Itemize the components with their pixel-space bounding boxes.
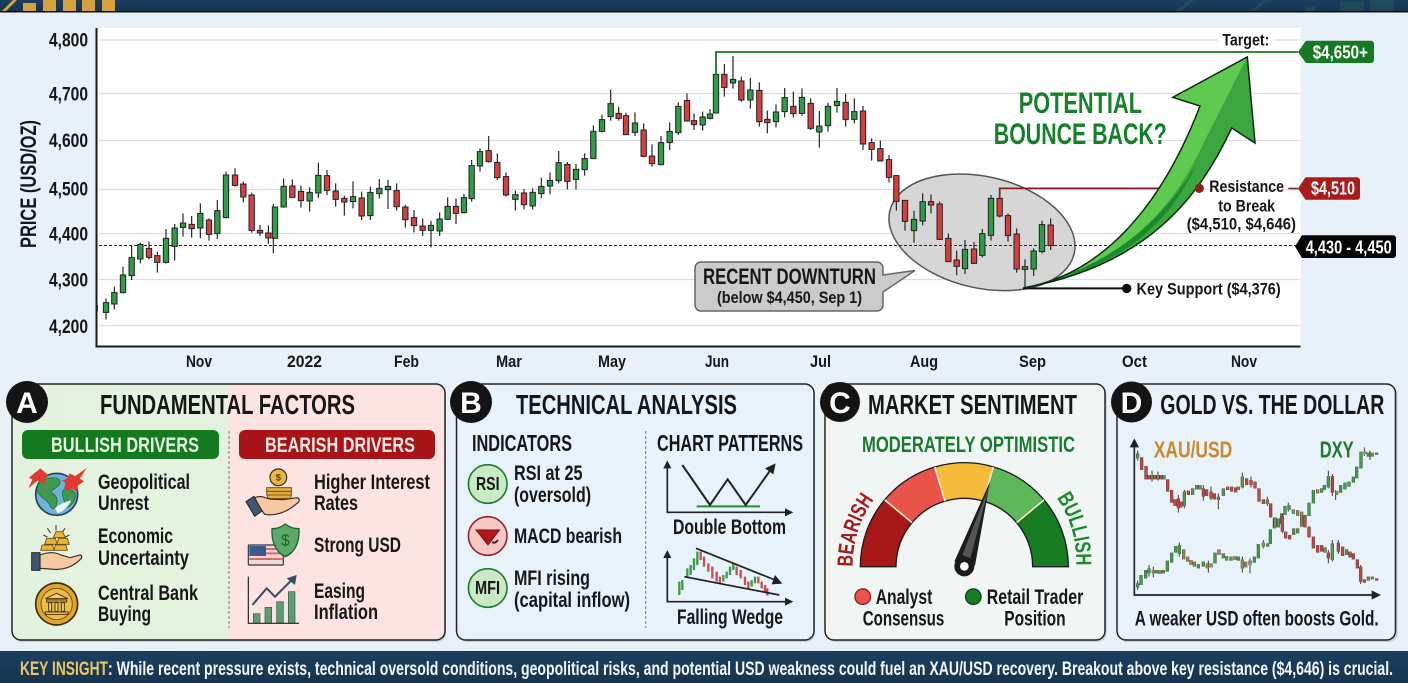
x axis months: Nov <box>186 352 212 371</box>
MFI indicator: (capital inflow) <box>514 589 630 612</box>
panel D: gold vs the dollar <box>1111 382 1398 642</box>
panel title: FUNDAMENTAL FACTORS <box>100 389 355 420</box>
x axis months: Feb <box>394 352 419 371</box>
icon: shield and USD: $ <box>281 533 290 550</box>
headline: potential bounce back: BOUNCE BACK? <box>994 118 1167 151</box>
bullish header: BULLISH DRIVERS <box>51 434 199 457</box>
indicators heading: INDICATORS <box>472 430 572 456</box>
tag: 4650 <box>1298 41 1374 63</box>
y axis ticks: 4,500 <box>49 180 88 200</box>
sentiment reading: MODERATELY OPTIMISTIC <box>862 432 1075 457</box>
x axis months: Oct <box>1122 352 1147 371</box>
candlesticks <box>97 53 1053 319</box>
higher rates label: Rates <box>314 492 358 515</box>
y axis ticks: 4,200 <box>49 317 88 338</box>
MFI indicator <box>468 567 630 612</box>
panel title: TECHNICAL ANALYSIS <box>516 389 737 420</box>
panel title: MARKET SENTIMENT <box>868 389 1077 420</box>
RSI indicator: RSI <box>476 474 500 494</box>
recent downturn ellipse <box>877 157 1087 308</box>
legend: retail trader position: Retail Trader <box>987 586 1083 609</box>
headline: potential bounce back <box>994 87 1167 151</box>
target label: Target: <box>1222 30 1269 49</box>
easing inflation label: Inflation <box>314 601 378 624</box>
x axis months: Jun <box>705 352 729 371</box>
RSI indicator: (oversold) <box>514 484 591 507</box>
higher rates label <box>314 471 430 515</box>
resistance dot and label: to Break <box>1218 196 1275 215</box>
panel A: fundamental factors <box>6 381 446 642</box>
central bank label <box>98 582 198 626</box>
target line <box>716 52 1298 75</box>
xau label: XAU/USD <box>1154 437 1232 463</box>
x axis months: Jul <box>810 352 831 371</box>
economic label: Economic <box>98 525 173 548</box>
panel B: technical analysis <box>450 381 815 642</box>
dxy series <box>1138 447 1377 590</box>
economic label: Uncertainty <box>98 547 189 570</box>
badge C <box>820 382 860 422</box>
geopolitical label: Geopolitical <box>98 471 190 494</box>
icon: hand with coins <box>246 469 299 516</box>
MFI indicator: MFI rising <box>514 567 590 590</box>
geopolitical label: Unrest <box>98 492 149 515</box>
dxy label: DXY <box>1320 437 1354 463</box>
badge B: B <box>460 387 482 420</box>
icon: globe <box>28 468 87 515</box>
legend: retail trader position: Position <box>1004 608 1066 631</box>
y axis ticks: 4,600 <box>49 131 88 152</box>
legend: analyst consensus <box>855 586 944 631</box>
y axis ticks: 4,800 <box>49 30 88 52</box>
x axis months: Mar <box>496 352 522 371</box>
resistance dot and label <box>1187 177 1298 234</box>
double bottom diagram <box>663 460 793 516</box>
badge D <box>1111 382 1152 422</box>
resistance dot and label: Resistance <box>1209 177 1284 196</box>
bounce arrow <box>1023 57 1255 288</box>
higher rates label: Higher Interest <box>314 471 430 494</box>
x axis months: Aug <box>910 352 938 371</box>
badge B <box>450 381 492 423</box>
y axis ticks: 4,300 <box>49 270 88 292</box>
x axis months <box>186 352 1257 371</box>
falling wedge label: Falling Wedge <box>677 606 783 629</box>
icon: chart with rising arrow <box>248 575 299 623</box>
sentiment gauge <box>837 462 1092 576</box>
key support label: Key Support ($4,376) <box>1136 280 1281 299</box>
headline: potential bounce back: POTENTIAL <box>1019 87 1142 120</box>
callout: recent downturn: RECENT DOWNTURN <box>703 264 876 289</box>
bullish arc label: BULLISH <box>1057 490 1092 564</box>
y axis title: PRICE (USD/OZ) <box>16 120 41 248</box>
legend: retail trader position <box>966 586 1083 631</box>
legend: analyst consensus: Consensus <box>863 608 944 631</box>
easing inflation label <box>314 580 378 624</box>
xau series <box>1138 451 1377 584</box>
RSI indicator <box>468 462 591 507</box>
badge C: C <box>829 387 851 420</box>
geopolitical label <box>98 471 190 515</box>
support line <box>1023 287 1126 289</box>
easing inflation label: Easing <box>314 580 365 603</box>
key insight banner: KEY INSIGHT <box>20 658 108 680</box>
y axis ticks: 4,400 <box>49 224 88 246</box>
chart patterns heading: CHART PATTERNS <box>657 430 803 456</box>
icon: shield and USD <box>248 524 299 565</box>
tag: 4510: $4,510 <box>1311 179 1355 199</box>
x axis months: Nov <box>1231 352 1257 371</box>
x axis months: May <box>598 352 626 371</box>
bullish header <box>22 430 219 459</box>
x axis months: Sep <box>1019 352 1046 371</box>
x axis months: 2022 <box>287 352 322 371</box>
RSI indicator: RSI at 25 <box>514 462 583 485</box>
MFI indicator: MFI <box>475 578 500 598</box>
MACD indicator: MACD bearish <box>514 525 622 548</box>
tag: 4650: $4,650+ <box>1313 43 1368 63</box>
central bank label: Central Bank <box>98 582 198 605</box>
key insight banner <box>0 651 1408 683</box>
economic label <box>98 525 189 570</box>
tag: 4510 <box>1298 177 1360 200</box>
bearish arc label: BEARISH <box>837 492 874 566</box>
callout: recent downturn <box>695 262 915 311</box>
central bank label: Buying <box>98 603 151 626</box>
y axis ticks <box>49 30 88 338</box>
resistance line <box>1000 188 1199 198</box>
bearish arc label <box>837 492 874 566</box>
double bottom label: Double Bottom <box>673 516 786 539</box>
correlation chart <box>1130 438 1381 600</box>
header band <box>0 0 1408 12</box>
needle <box>954 482 990 576</box>
icon: hand with coins: $ <box>276 473 282 483</box>
badge D: D <box>1121 387 1142 420</box>
badge A: A <box>16 387 38 420</box>
price chart <box>16 28 1396 371</box>
bearish header <box>239 430 435 459</box>
bearish header: BEARISH DRIVERS <box>265 434 415 457</box>
current price dashed line <box>99 244 1296 246</box>
callout: recent downturn: (below $4,450, Sep 1) <box>717 288 862 307</box>
strong usd label: Strong USD <box>314 534 401 557</box>
MACD indicator <box>468 517 622 555</box>
icon: gold bars on hand <box>32 525 82 570</box>
badge A <box>6 381 48 423</box>
falling wedge diagram <box>663 548 793 606</box>
resistance dot and label: ($4,510, $4,646) <box>1187 215 1296 234</box>
icon: central bank coin <box>36 583 78 625</box>
y axis ticks: 4,700 <box>49 84 88 106</box>
legend: analyst consensus: Analyst <box>876 586 932 609</box>
panel C: market sentiment <box>820 382 1106 642</box>
